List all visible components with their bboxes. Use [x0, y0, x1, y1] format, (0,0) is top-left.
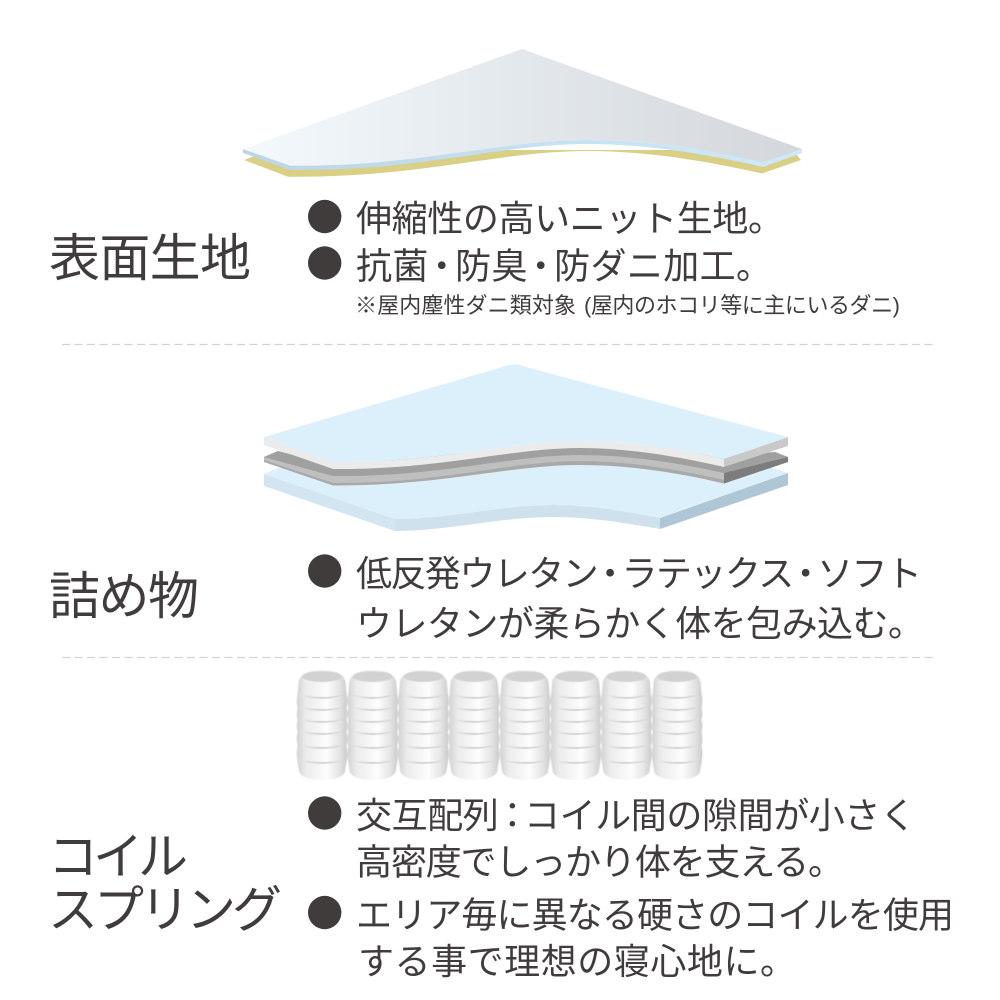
heading: filling: 詰め物 [49, 568, 199, 625]
bullet one: surface fabric: 伸縮性の高いニット生地。 [356, 198, 784, 239]
bullet one: coil arrangement: 高密度でしっかり体を支える。 [356, 842, 844, 882]
grey layer light band [264, 455, 724, 483]
illustration: filling layers [264, 364, 788, 531]
grey middle layer base [264, 445, 788, 486]
heading: coil spring: スプリング [48, 882, 282, 938]
top foam surface [264, 364, 788, 462]
bottom foam surface [264, 445, 788, 519]
bottom foam side faces [395, 505, 660, 531]
fabric edge [243, 140, 802, 170]
illustration: coil springs [297, 670, 702, 780]
grey layer dark band [264, 443, 788, 476]
bullet one: coil arrangement: 交互配列：コイル間の隙間が小さく [356, 795, 916, 836]
bullet two: coil hardness: する事で理想の寝心地に。 [358, 941, 796, 982]
bullet: filling [308, 553, 924, 644]
bullet: filling: 低反発ウレタン・ラテックス・ソフト [356, 553, 922, 594]
footnote: mites: (屋内のホコリ等に主にいるダニ) [584, 293, 900, 318]
bullet two: coil hardness [308, 894, 954, 982]
yellow backing layer [244, 150, 801, 177]
footnote: mites: ※屋内塵性ダニ類対象 [355, 293, 576, 318]
bullet one: coil arrangement [308, 795, 916, 882]
top foam right side [724, 437, 788, 467]
fabric top surface [243, 49, 802, 166]
bullet two: surface fabric: 抗菌・防臭・防ダニ加工。 [356, 246, 772, 286]
top foam edge [264, 437, 724, 469]
heading: surface fabric: 表面生地 [49, 230, 251, 287]
illustration: surface fabric layers [243, 49, 802, 177]
bullet two: coil hardness: エリア毎に異なる硬さのコイルを使用 [356, 894, 954, 936]
heading: coil spring: コイル [48, 829, 188, 885]
heading: coil spring [48, 829, 282, 938]
bullet: filling: ウレタンが柔らかく体を包み込む。 [356, 603, 924, 644]
grey layer right side [724, 457, 788, 484]
